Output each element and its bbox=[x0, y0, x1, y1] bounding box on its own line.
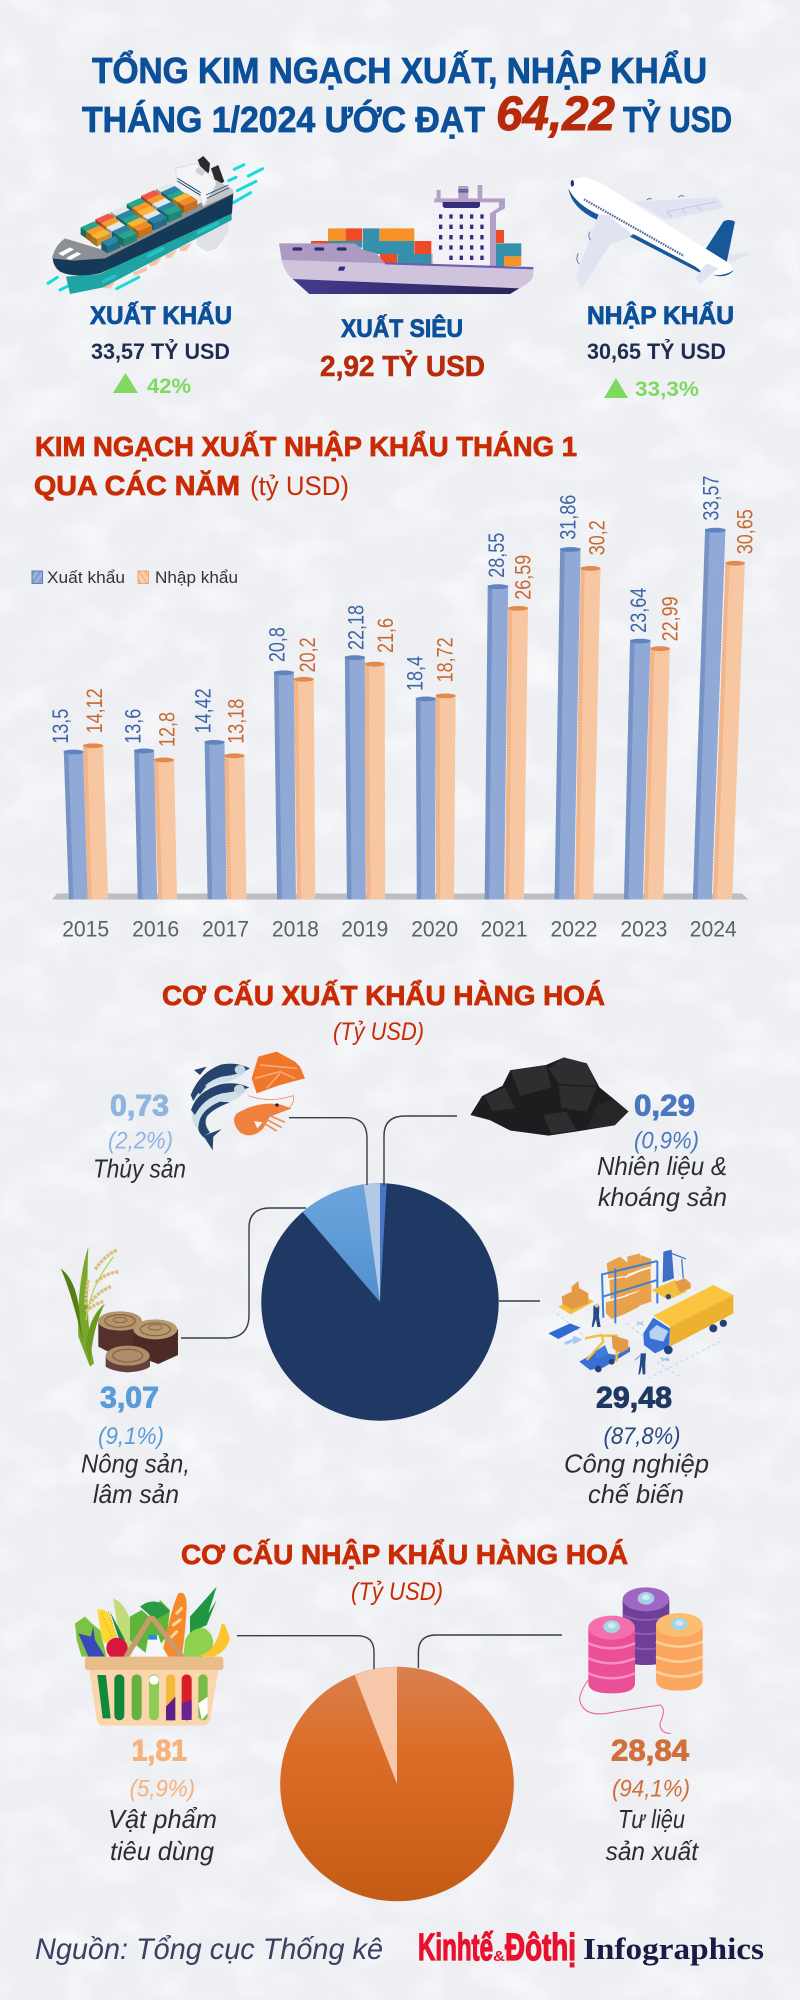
label: vật phẩm: (5,9%) bbox=[130, 1776, 195, 1803]
data labels: xuất khẩu: 14,42 bbox=[192, 688, 216, 733]
heading: bar chart: KIM NGẠCH XUẤT NHẬP KHẨU THÁNG 1 bbox=[35, 431, 577, 462]
icon: rice and logs bbox=[61, 1247, 178, 1372]
title: TỶ USD bbox=[623, 99, 732, 140]
icon: coal bbox=[470, 1057, 629, 1136]
icon: container ship (export) bbox=[48, 156, 263, 294]
label: công nghiệp: Công nghiệp bbox=[564, 1448, 709, 1478]
legend: Nhập khẩu bbox=[155, 568, 238, 587]
label: thủy sản bbox=[93, 1090, 186, 1184]
data labels: nhập khẩu: 21,6 bbox=[374, 618, 398, 653]
year axis: 2015 bbox=[62, 916, 109, 942]
data labels: xuất khẩu: 31,86 bbox=[557, 495, 581, 540]
label: tư liệu: Tư liệu bbox=[618, 1804, 685, 1834]
icon: thread spools bbox=[580, 1587, 703, 1733]
title: THÁNG 1/2024 ƯỚC ĐẠT bbox=[82, 98, 485, 140]
legend bbox=[32, 568, 238, 587]
label: nhiên liệu bbox=[597, 1090, 727, 1212]
label: nông sản: lâm sản bbox=[93, 1479, 179, 1509]
heading: export structure: CƠ CẤU XUẤT KHẨU HÀNG HOÁ bbox=[162, 980, 605, 1011]
stat: nhập khẩu: NHẬP KHẨU bbox=[587, 300, 734, 330]
title: TỔNG KIM NGẠCH XUẤT, NHẬP KHẨU bbox=[92, 48, 707, 91]
data labels: nhập khẩu: 22,99 bbox=[659, 596, 683, 641]
year axis: 2022 bbox=[550, 916, 598, 942]
year axis bbox=[62, 916, 737, 942]
chart floor bbox=[52, 894, 748, 900]
label: vật phẩm bbox=[108, 1735, 217, 1866]
source: Nguồn: Tổng cục Thống kê bbox=[35, 1933, 383, 1966]
bars: nhập khẩu bbox=[83, 561, 745, 899]
year axis: 2023 bbox=[620, 916, 667, 942]
label: nhiên liệu: (0,9%) bbox=[634, 1128, 699, 1155]
data labels: xuất khẩu: 13,6 bbox=[122, 709, 146, 744]
label: tư liệu: (94,1%) bbox=[612, 1776, 690, 1803]
logo: Đôthị bbox=[505, 1927, 576, 1969]
stat: nhập khẩu bbox=[587, 300, 734, 401]
heading: export structure: (Tỷ USD) bbox=[333, 1018, 424, 1046]
bar chart bbox=[49, 476, 758, 942]
heading: import structure bbox=[181, 1539, 628, 1606]
icon: warehouse and truck bbox=[548, 1250, 733, 1378]
label: công nghiệp: chế biến bbox=[588, 1479, 684, 1509]
label: thủy sản: (2,2%) bbox=[108, 1128, 173, 1155]
data labels: nhập khẩu: 12,8 bbox=[156, 712, 180, 747]
year axis: 2021 bbox=[480, 916, 528, 942]
data labels: nhập khẩu: 20,2 bbox=[296, 637, 320, 672]
year axis: 2020 bbox=[411, 916, 458, 942]
title: 64,22 bbox=[496, 88, 615, 141]
logo: Kinhtế bbox=[418, 1927, 494, 1969]
icon: container ship (trade surplus) bbox=[279, 185, 533, 294]
data labels: nhập khẩu: 14,12 bbox=[83, 688, 108, 733]
label: vật phẩm: 1,81 bbox=[132, 1735, 187, 1768]
data labels: nhập khẩu: 26,59 bbox=[512, 555, 536, 600]
pie chart: export bbox=[261, 1183, 499, 1421]
label: công nghiệp: (87,8%) bbox=[604, 1423, 680, 1450]
stat: nhập khẩu: 30,65 TỶ USD bbox=[587, 339, 726, 364]
data labels: xuất khẩu: 22,18 bbox=[345, 605, 369, 650]
label: nông sản: (9,1%) bbox=[98, 1423, 164, 1450]
data labels: xuất khẩu: 20,8 bbox=[266, 627, 290, 662]
stat: xuất siêu: XUẤT SIÊU bbox=[341, 313, 463, 343]
data labels: nhập khẩu: 30,65 bbox=[734, 509, 758, 554]
heading: export structure bbox=[162, 980, 605, 1046]
label: công nghiệp bbox=[564, 1382, 709, 1509]
label: công nghiệp: 29,48 bbox=[596, 1382, 672, 1415]
label: tư liệu: sản xuất bbox=[606, 1836, 700, 1866]
connector lines: export bbox=[181, 1116, 540, 1338]
label: tư liệu bbox=[606, 1735, 700, 1866]
heading: import structure: CƠ CẤU NHẬP KHẨU HÀNG HOÁ bbox=[181, 1539, 628, 1570]
data labels: nhập khẩu: 13,18 bbox=[225, 699, 249, 744]
label: thủy sản: Thủy sản bbox=[93, 1154, 186, 1184]
connector lines: import bbox=[237, 1635, 562, 1669]
label: nhiên liệu: Nhiên liệu & bbox=[597, 1151, 727, 1181]
label: tư liệu: 28,84 bbox=[611, 1735, 689, 1768]
bars: xuất khẩu bbox=[64, 528, 726, 899]
year axis: 2018 bbox=[272, 916, 319, 942]
logo: & bbox=[493, 1948, 505, 1965]
year axis: 2017 bbox=[202, 916, 249, 942]
data labels: xuất khẩu: 13,5 bbox=[49, 709, 73, 744]
title bbox=[82, 48, 732, 141]
stat: xuất khẩu: XUẤT KHẨU bbox=[90, 301, 232, 330]
icon: airplane bbox=[568, 177, 750, 288]
label: nông sản: Nông sản, bbox=[81, 1448, 190, 1478]
stat: xuất siêu bbox=[320, 313, 485, 383]
logo bbox=[418, 1927, 764, 1969]
icon: fish and shrimp bbox=[191, 1052, 305, 1150]
data labels: nhập khẩu: 18,72 bbox=[434, 637, 458, 682]
data labels: nhập khẩu bbox=[83, 509, 758, 747]
data labels: xuất khẩu: 18,4 bbox=[404, 656, 428, 691]
data labels: xuất khẩu: 28,55 bbox=[485, 533, 510, 578]
heading: import structure: (Tỷ USD) bbox=[351, 1578, 443, 1606]
heading: bar chart bbox=[34, 431, 577, 501]
data labels: xuất khẩu: 33,57 bbox=[700, 476, 724, 521]
data labels: nhập khẩu: 30,2 bbox=[586, 520, 610, 555]
label: vật phẩm: Vật phẩm bbox=[108, 1804, 217, 1834]
data labels: xuất khẩu: 23,64 bbox=[627, 588, 651, 633]
logo: Infographics bbox=[583, 1931, 764, 1966]
label: thủy sản: 0,73 bbox=[110, 1090, 169, 1123]
legend: Xuất khẩu bbox=[47, 568, 125, 587]
label: nhiên liệu: khoáng sản bbox=[598, 1182, 727, 1212]
stat: xuất khẩu: 42% bbox=[147, 375, 191, 398]
year axis: 2016 bbox=[132, 916, 179, 942]
year axis: 2024 bbox=[690, 916, 737, 942]
year axis: 2019 bbox=[341, 916, 388, 942]
stat: xuất khẩu bbox=[90, 301, 232, 398]
icon: grocery basket bbox=[75, 1587, 230, 1726]
heading: bar chart: QUA CÁC NĂM bbox=[34, 470, 240, 501]
stat: xuất khẩu: 33,57 TỶ USD bbox=[91, 339, 230, 364]
label: vật phẩm: tiêu dùng bbox=[110, 1836, 215, 1866]
label: nông sản bbox=[81, 1382, 190, 1509]
data labels: xuất khẩu bbox=[49, 476, 724, 744]
label: nông sản: 3,07 bbox=[100, 1382, 159, 1415]
pie chart: import bbox=[280, 1667, 514, 1901]
heading: bar chart: (tỷ USD) bbox=[250, 471, 349, 501]
stat: nhập khẩu: 33,3% bbox=[635, 378, 699, 401]
label: nhiên liệu: 0,29 bbox=[634, 1090, 695, 1123]
stat: xuất siêu: 2,92 TỶ USD bbox=[320, 349, 485, 383]
